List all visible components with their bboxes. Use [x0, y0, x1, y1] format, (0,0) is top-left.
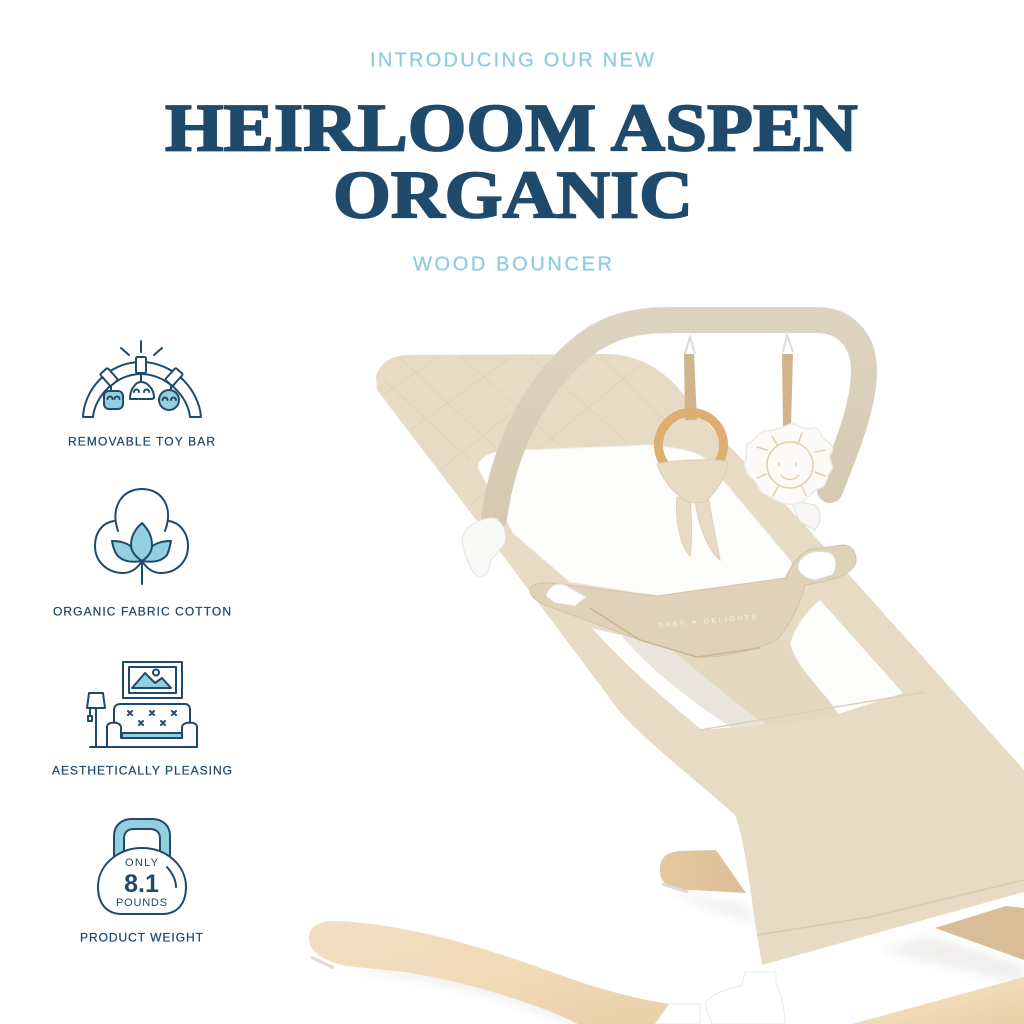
- title: [165, 90, 858, 233]
- toy loops: [685, 335, 793, 354]
- label: product weight: PRODUCT WEIGHT: [80, 930, 204, 944]
- subtitle: WOOD BOUNCER: [413, 254, 612, 276]
- pocket seam: [700, 692, 925, 730]
- label: aesthetically pleasing: AESTHETICALLY PLEASING: [52, 764, 232, 778]
- harness: [530, 545, 856, 657]
- label: removable toy bar: REMOVABLE TOY BAR: [68, 434, 215, 448]
- front right rocker: [852, 977, 1024, 1024]
- back right leg: [935, 906, 1024, 960]
- feature: removable toy bar: [68, 341, 215, 448]
- upper mesh: [478, 445, 792, 596]
- rocker shadows: [345, 890, 1024, 1024]
- toy straps: [684, 354, 793, 428]
- feature: product weight: [80, 819, 204, 944]
- icon: kettlebell: [98, 819, 186, 914]
- feature: aesthetically pleasing: [52, 662, 232, 778]
- icon: kettlebell: 8.1: [124, 870, 159, 898]
- lower left mesh: [592, 628, 767, 730]
- feature: organic cotton: [53, 489, 231, 618]
- wooden ring: [658, 412, 724, 478]
- title: ORGANIC: [333, 157, 693, 233]
- product photo: bouncer: [309, 320, 1024, 1024]
- bar base clip: [462, 518, 506, 577]
- eyebrow heading: INTRODUCING OUR NEW: [370, 50, 654, 72]
- brand text: BABY ❧ DELIGHTS: [658, 614, 759, 630]
- hub: [655, 972, 785, 1024]
- icon: cotton: [95, 489, 188, 584]
- rocker foot pads: [311, 884, 688, 968]
- bunny toy: [657, 460, 728, 560]
- crotch strap: [660, 640, 838, 726]
- harness seam: [590, 608, 760, 657]
- harness clips: [546, 552, 836, 606]
- back left leg: [660, 850, 746, 893]
- icon: sofa, lamp and picture: [87, 662, 197, 747]
- seat hem seam: [757, 880, 1024, 935]
- lower right mesh: [790, 600, 903, 714]
- toy bar arch: [494, 320, 864, 518]
- icon: kettlebell: ONLY: [125, 857, 159, 869]
- front left rocker: [309, 921, 669, 1024]
- sun toy: [745, 424, 832, 504]
- icon: kettlebell: POUNDS: [116, 897, 167, 909]
- quilting: [383, 356, 665, 505]
- seat fabric: [376, 354, 1024, 965]
- right clip: [790, 500, 820, 530]
- title: HEIRLOOM ASPEN: [165, 90, 858, 166]
- icon: toy bar: [83, 341, 201, 417]
- label: organic fabric cotton: ORGANIC FABRIC COTTON: [53, 604, 231, 618]
